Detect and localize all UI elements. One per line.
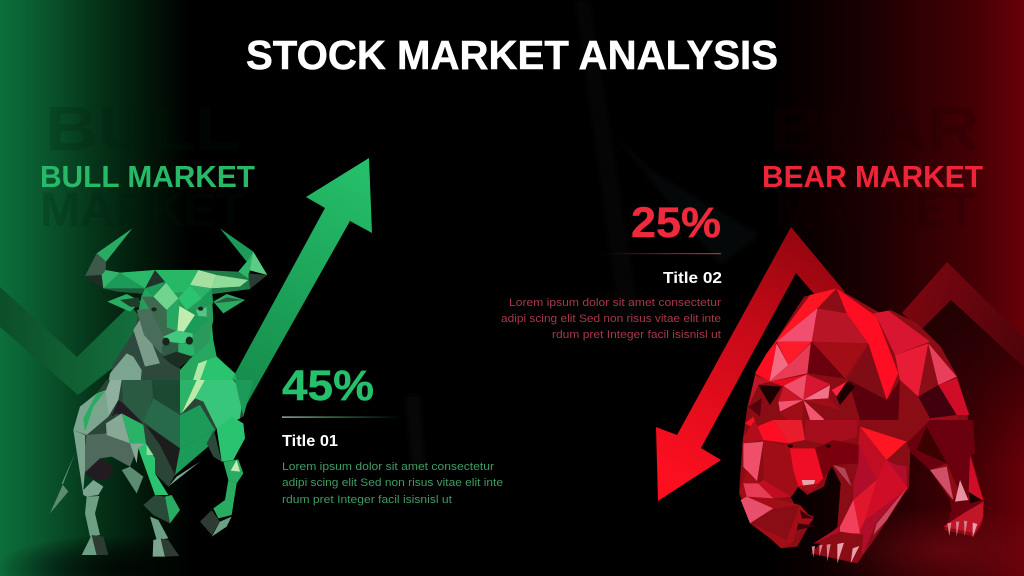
ghost text: bull market: BULL xyxy=(45,95,240,164)
icon: low-poly bear xyxy=(739,288,984,563)
title 02: Title 02 xyxy=(663,270,722,287)
ghost text: bear market xyxy=(770,95,980,237)
stat: bull 45 percent: 45% xyxy=(282,362,374,410)
bull head and horns xyxy=(85,228,267,390)
ghost text: bear market: BEAR xyxy=(770,95,980,164)
text block: bull description: adipi scing elit Sed non risus vitae elit inte xyxy=(282,477,503,489)
stat: bear 25 percent xyxy=(600,199,722,287)
text block: bull description xyxy=(282,461,503,506)
icon: low-poly bull xyxy=(50,228,267,557)
stat: bear 25 percent: 25% xyxy=(631,199,721,247)
text block: bear description: rdum pret Integer facil isisnisl ut xyxy=(552,329,721,341)
text block: bull description: Lorem ipsum dolor sit amet consectetur xyxy=(282,461,495,473)
text block: bear description: Lorem ipsum dolor sit amet consectetur xyxy=(509,297,722,309)
bear silhouette xyxy=(739,288,984,563)
text block: bear description: adipi scing elit Sed non risus vitae elit inte xyxy=(501,313,721,325)
heading: bear market: BEAR MARKET xyxy=(762,159,983,194)
bull body and legs xyxy=(50,380,253,557)
text block: bear description xyxy=(501,297,722,341)
title: STOCK MARKET ANALYSIS xyxy=(246,32,778,78)
bear back and head top xyxy=(745,288,969,430)
heading: bull market: BULL MARKET xyxy=(40,159,255,194)
stat: bull 45 percent xyxy=(282,362,402,450)
ghost text: bear market: MARKET xyxy=(775,184,975,237)
arrow: bear down xyxy=(656,227,1024,501)
title 01: Title 01 xyxy=(282,433,338,450)
ghost text: bull market xyxy=(40,95,245,237)
text block: bull description: rdum pret Integer facil isisnisl ut xyxy=(282,494,452,506)
bear face, paws and legs xyxy=(740,420,983,563)
arrow: bull up xyxy=(0,158,372,425)
ghost text: bull market: MARKET xyxy=(40,184,245,237)
